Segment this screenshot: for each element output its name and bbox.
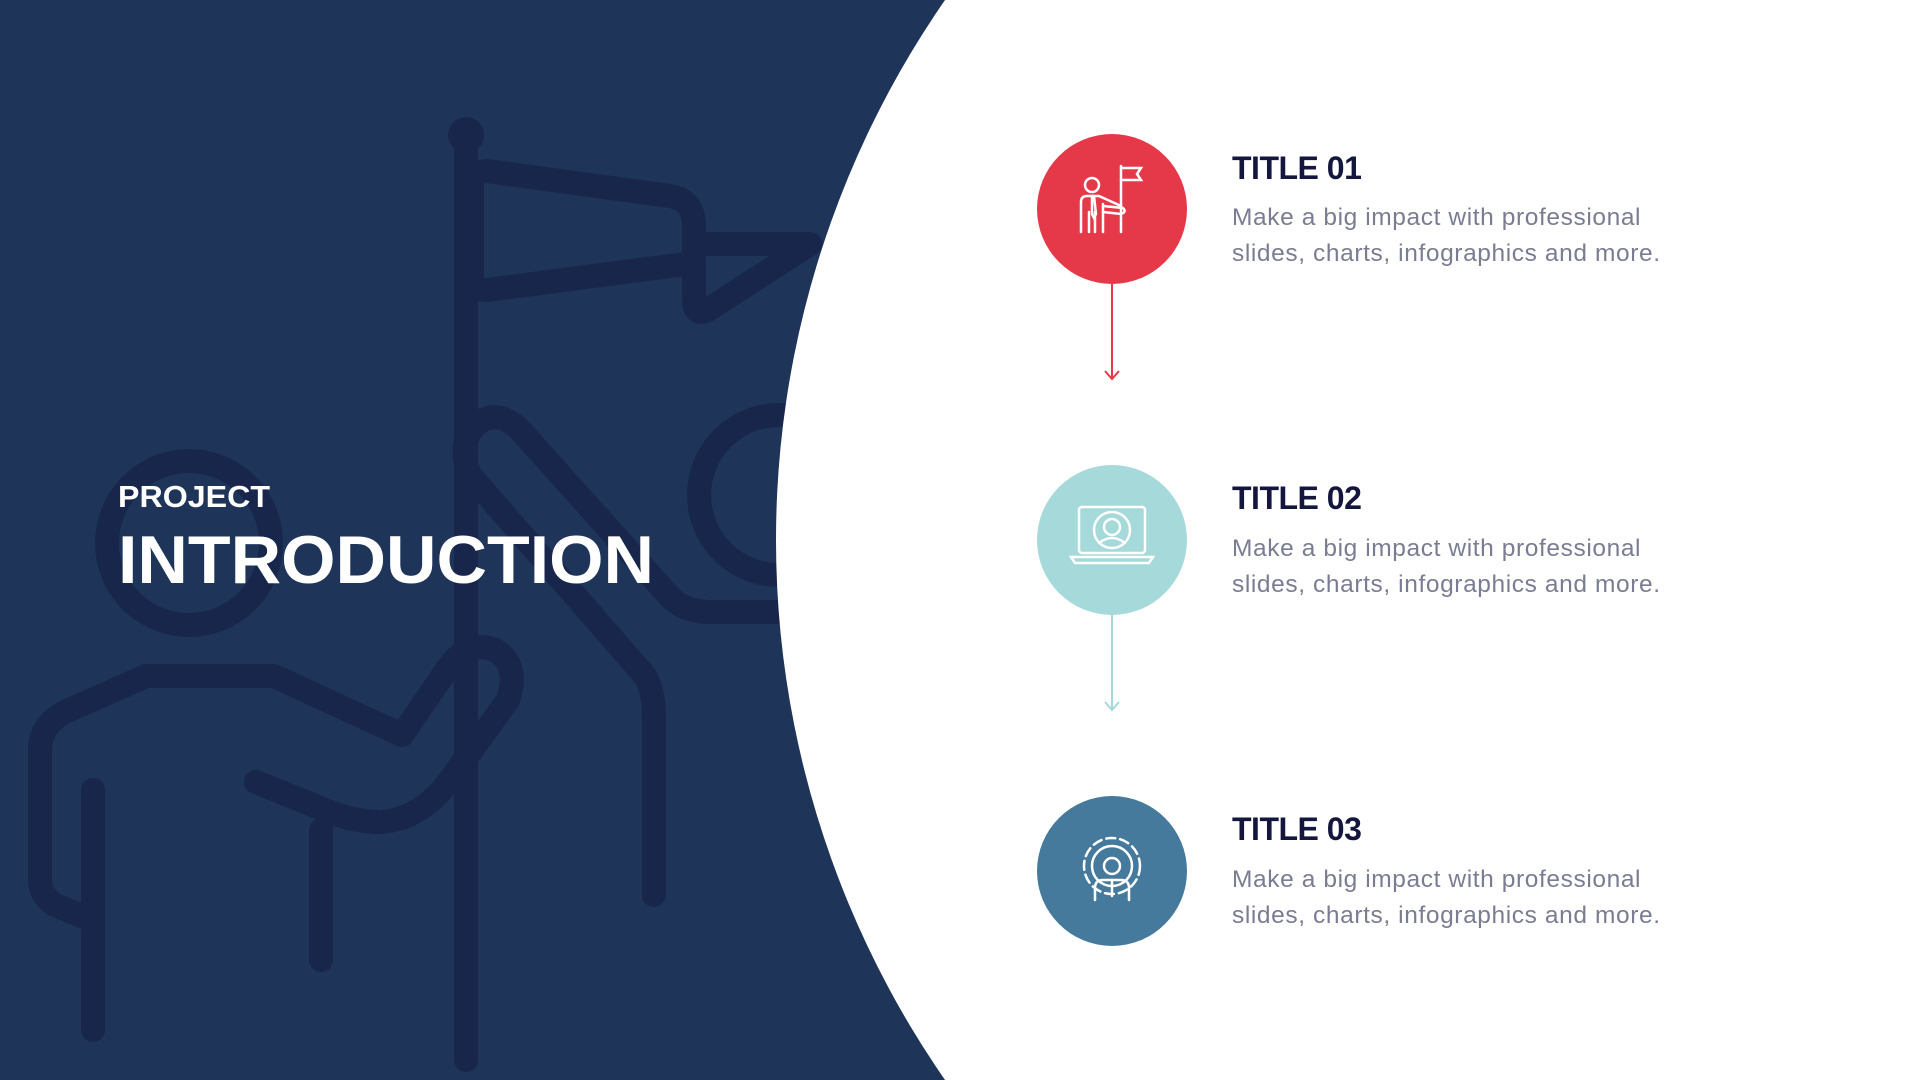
heading: project introduction: [118, 479, 654, 592]
white curved area: [776, 0, 1920, 1080]
text 03: Make a big impact with professional: [1232, 866, 1641, 893]
text 03: [1232, 866, 1661, 929]
title 03: TITLE 03: [1232, 811, 1361, 847]
decorative background icon: person with flag: [40, 117, 859, 1060]
text 01: [1232, 204, 1661, 267]
text 01: Make a big impact with professional: [1232, 204, 1641, 231]
text 03: slides, charts, infographics and more.: [1232, 902, 1661, 929]
step 1 icon: person with flag: [1037, 134, 1187, 284]
heading: project introduction: PROJECT: [118, 479, 270, 514]
title 02: TITLE 02: [1232, 480, 1361, 516]
step 3 icon: gear with person: [1037, 796, 1187, 946]
step 2 icon: laptop with person: [1037, 465, 1187, 615]
text 02: Make a big impact with professional: [1232, 535, 1641, 562]
arrow 2: [1104, 615, 1120, 712]
title 01: TITLE 01: [1232, 150, 1361, 186]
arrow 1: [1104, 284, 1120, 380]
text 02: slides, charts, infographics and more.: [1232, 571, 1661, 598]
text 01: slides, charts, infographics and more.: [1232, 240, 1661, 267]
text 02: [1232, 535, 1661, 598]
